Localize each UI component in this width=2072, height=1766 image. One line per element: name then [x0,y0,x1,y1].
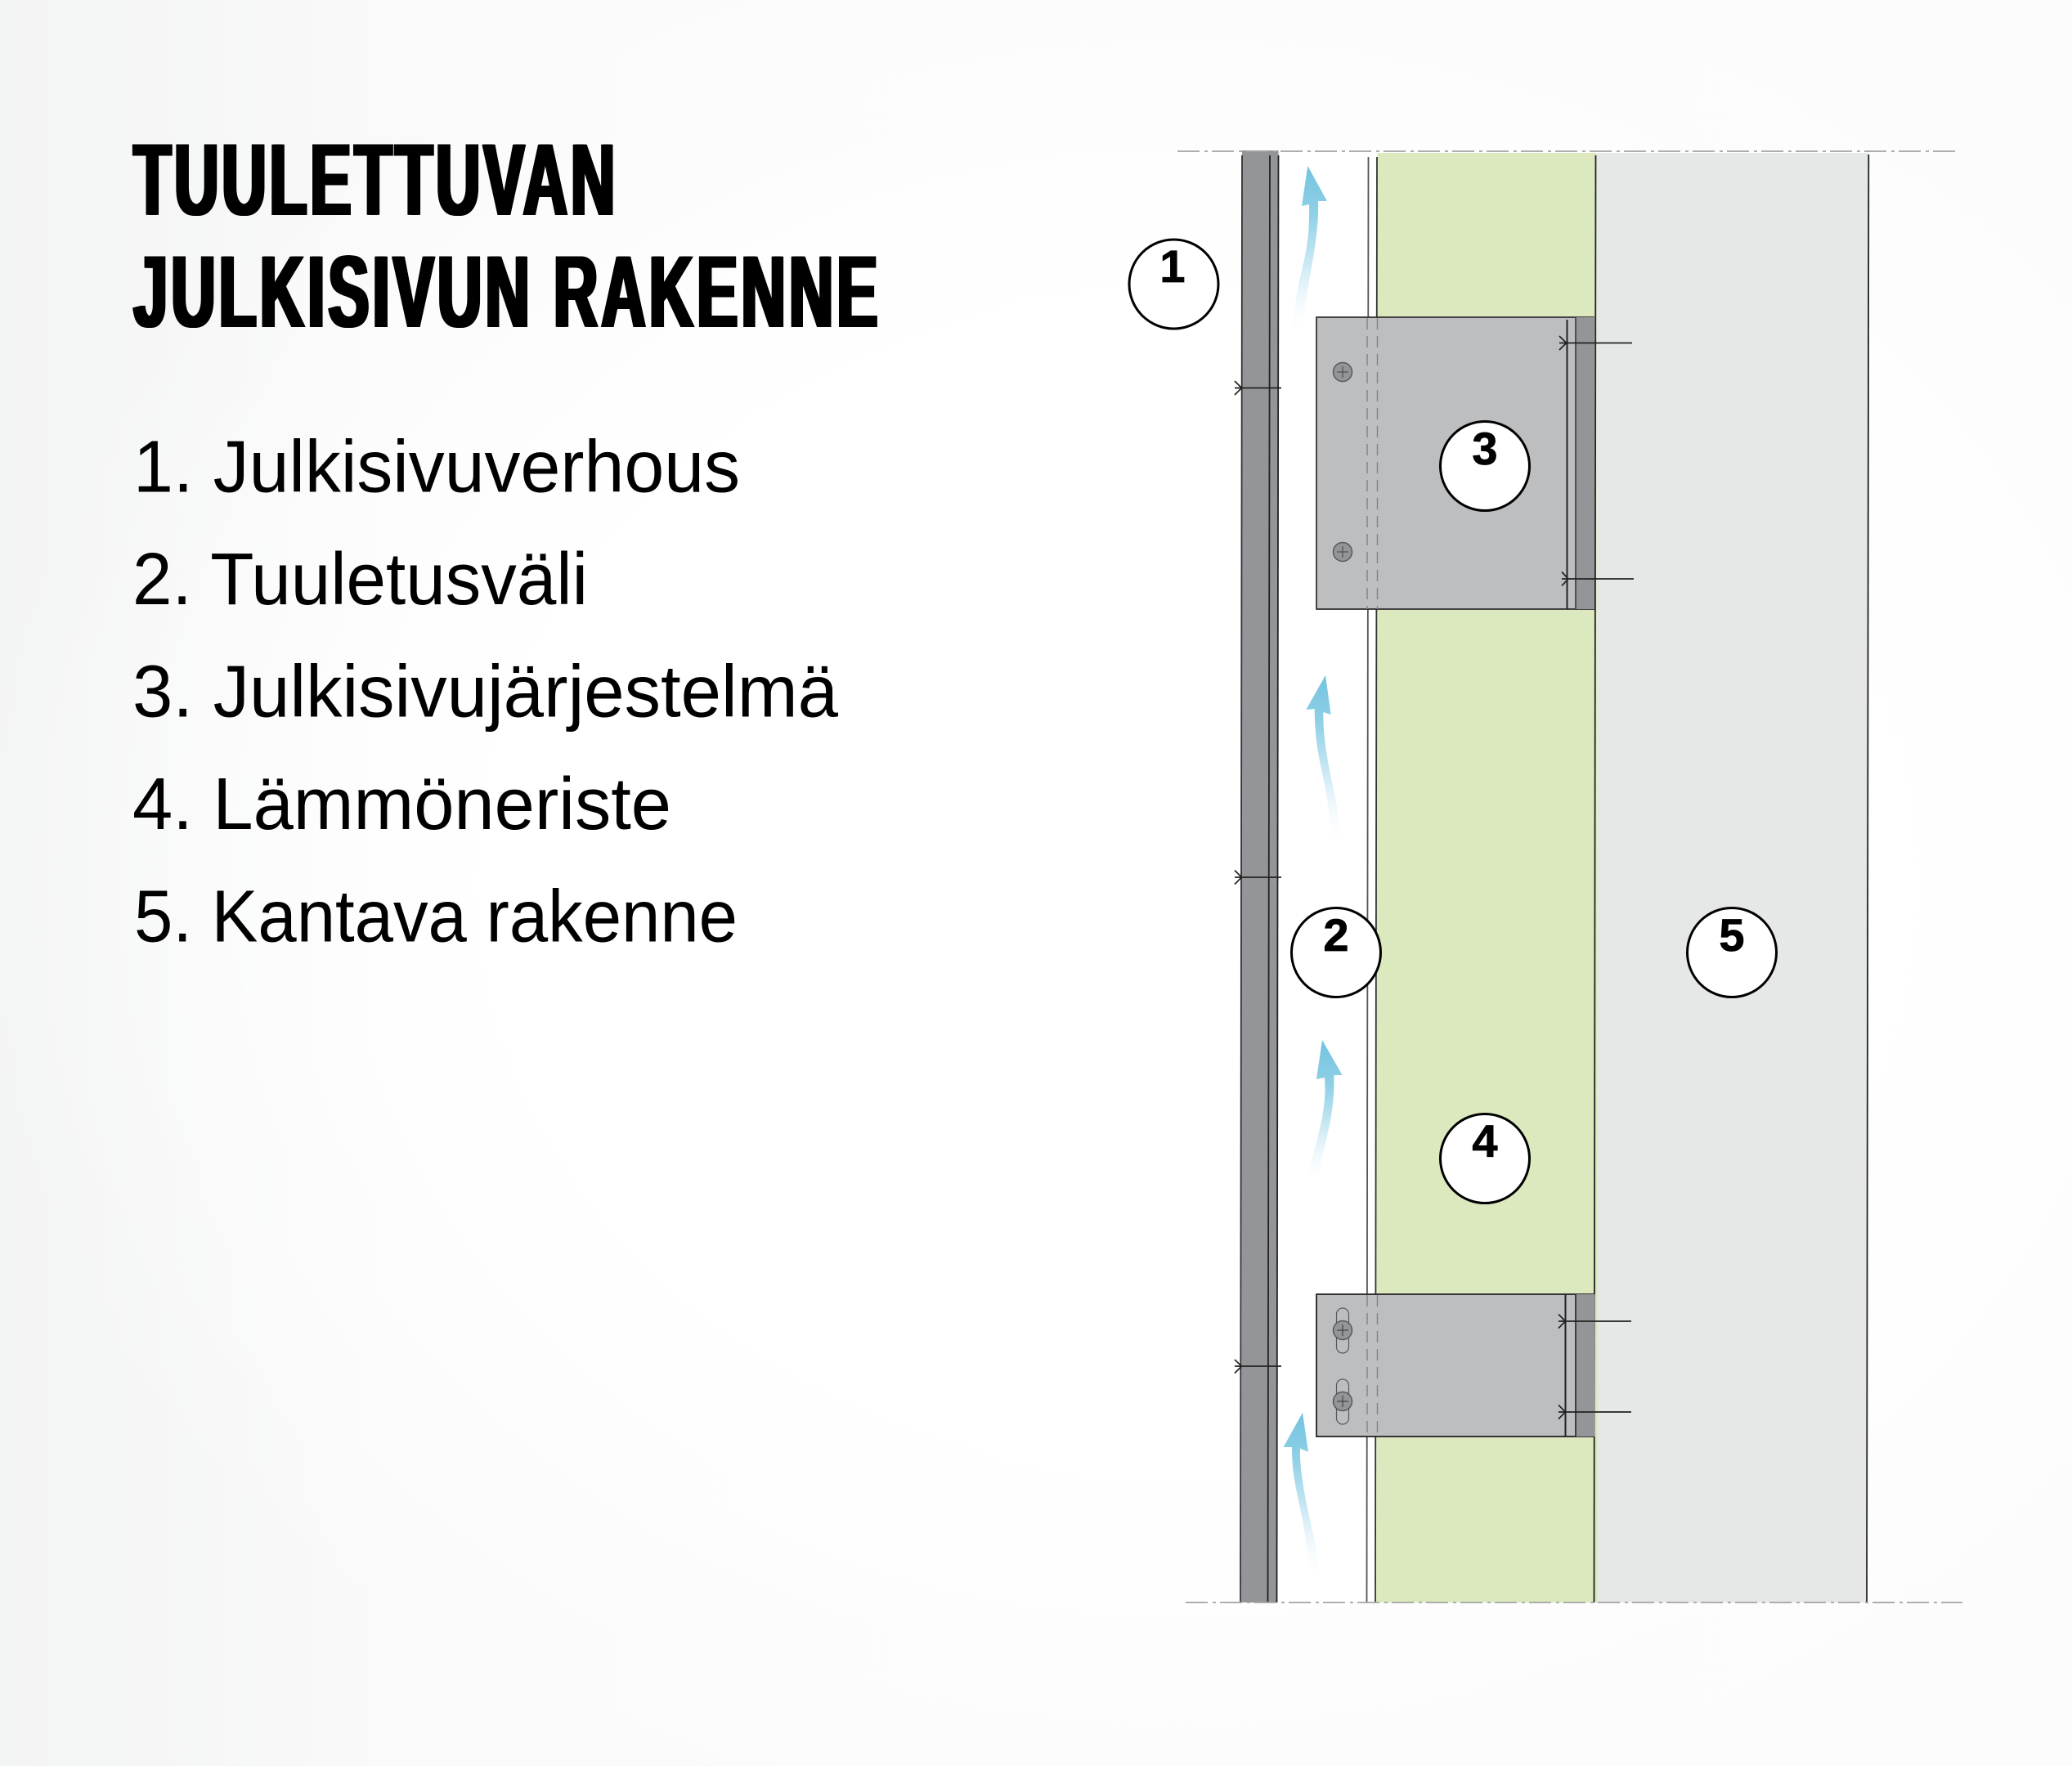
legend item 2: 2. Tuuletusväli [132,539,588,621]
legend list [132,427,839,958]
ventilation gap background [1277,152,1377,1602]
number badge 1 [1129,240,1218,329]
upper facade bracket [1316,317,1594,609]
airflow arrow 4 [1284,1413,1319,1600]
lower bracket slotted screw 2 [1333,1379,1352,1424]
facade cladding [1240,150,1279,1602]
number badge 5 [1688,908,1776,997]
legend item 4: 4. Lämmöneriste [132,764,671,845]
section break line top [1177,150,1956,152]
number badge 2 [1292,908,1380,997]
number badge 4 [1441,1114,1529,1203]
number badge 3: 3 [1472,423,1498,474]
title [132,123,879,349]
airflow arrow 1 [1291,166,1327,356]
legend item 1: 1. Julkisivuverhous [133,427,740,509]
upper bracket screw 2 [1333,543,1352,561]
section break line bottom [1186,1602,1962,1603]
thermal insulation [1375,153,1598,1602]
legend item 5: 5. Kantava rakenne [134,876,738,958]
load-bearing structure [1594,153,1868,1602]
title line 1: TUULETTUVAN [132,123,617,237]
legend item 3: 3. Julkisivujärjestelmä [132,651,839,733]
lower bracket slotted screw 1 [1333,1308,1352,1353]
membrane line [1367,157,1369,1602]
number badge 3 [1441,422,1529,510]
fasteners [1235,336,1634,1419]
number badge 4: 4 [1472,1115,1498,1167]
airflow arrow 2 [1306,675,1342,864]
number badge 5: 5 [1719,909,1745,961]
number badge 1: 1 [1159,240,1186,292]
airflow arrow 3 [1305,1040,1343,1194]
upper bracket screw 1 [1333,363,1352,381]
lower facade bracket [1316,1294,1594,1437]
number badge 2: 2 [1323,909,1349,961]
title line 2: JULKISIVUN RAKENNE [132,235,879,349]
